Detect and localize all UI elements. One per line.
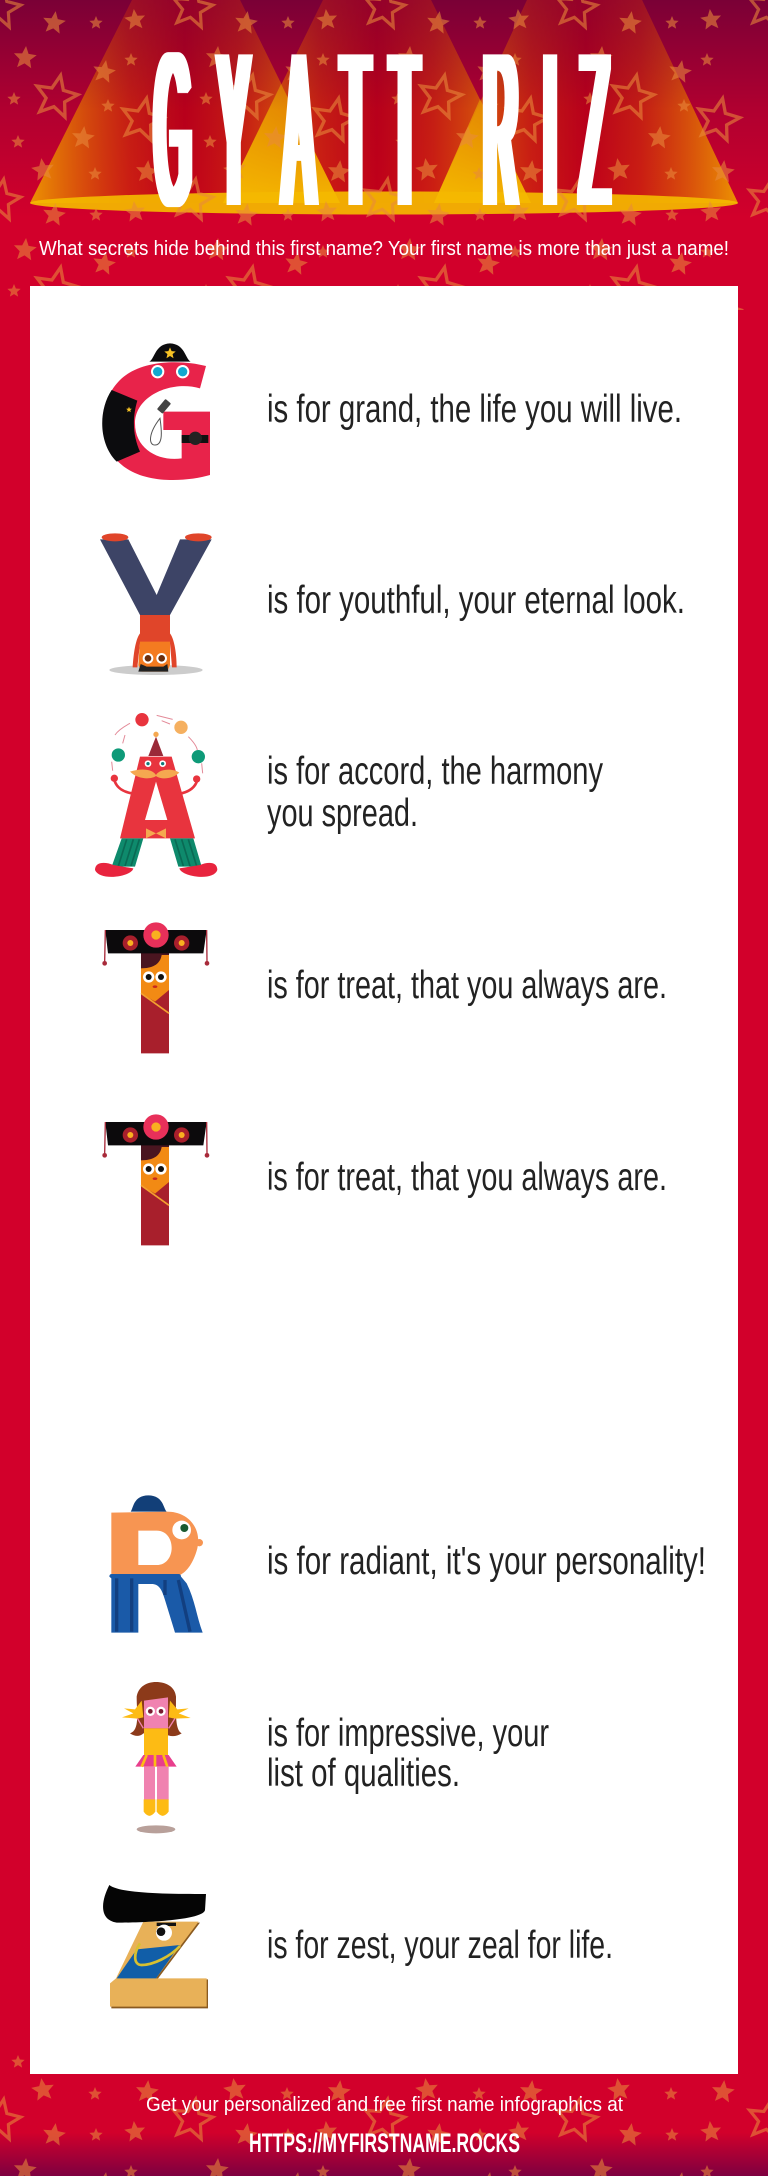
- star pattern: top: [0, 0, 768, 310]
- spotlights: [0, 0, 768, 214]
- icon: letter T (second): [102, 1114, 209, 1245]
- subtitle: What secrets hide behind this first name? Your first name is more than just a name!: [39, 238, 729, 260]
- icon: letter T: [102, 922, 209, 1053]
- row text: Z: is for zest, your zeal for life.: [267, 1924, 613, 1967]
- icon: letter A: [95, 713, 217, 877]
- icon: letter G: [102, 343, 210, 480]
- row text: A: you spread.: [267, 792, 418, 835]
- row text: I: is for impressive, your: [267, 1712, 549, 1755]
- row text: A: [267, 750, 603, 835]
- star pattern: bottom: [0, 2050, 768, 2176]
- row text: I: [267, 1712, 549, 1795]
- title: GYATT RIZ: [155, 7, 609, 252]
- row text: A: is for accord, the harmony: [267, 750, 603, 793]
- icon: letter Y: [100, 533, 212, 675]
- icon: letter I: [122, 1682, 191, 1833]
- icon: letter Z: [103, 1885, 208, 2008]
- footer url: HTTPS://MYFIRSTNAME.ROCKS: [249, 2128, 520, 2158]
- panel: white content: [30, 286, 738, 2074]
- row text: I: list of qualities.: [267, 1752, 460, 1795]
- icon: letter R: [109, 1495, 203, 1633]
- footer text: Get your personalized and free first name infographics at: [146, 2094, 623, 2116]
